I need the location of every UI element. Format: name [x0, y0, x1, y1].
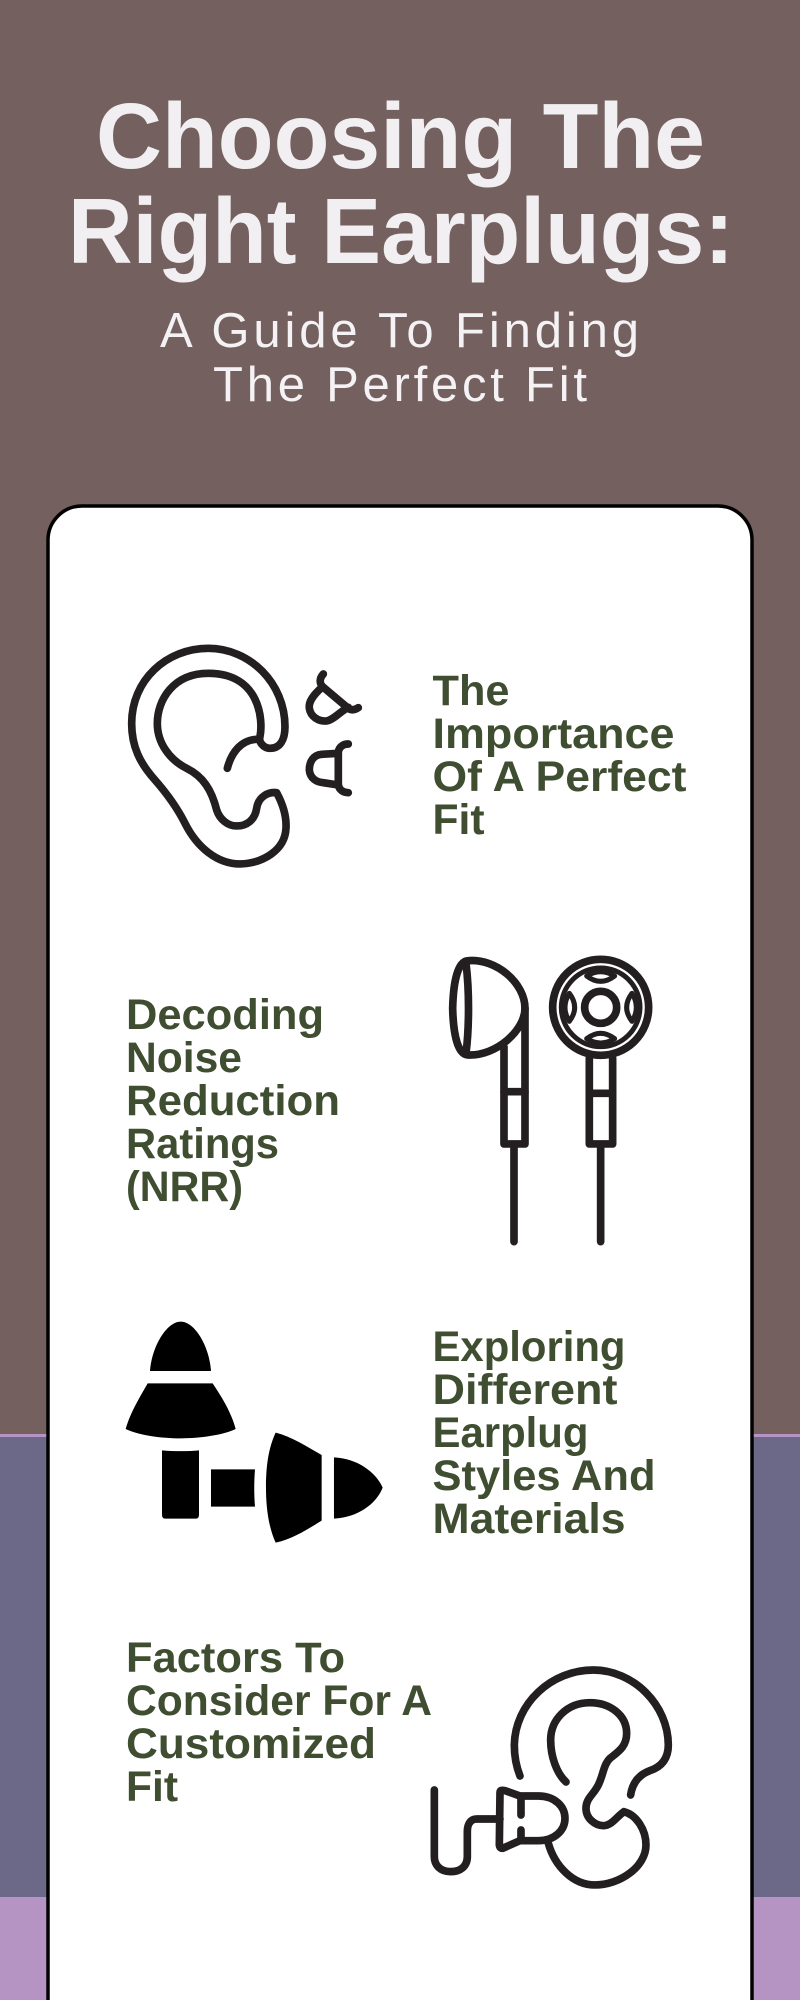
heading: decoding noise reduction ratings: Decoding: [126, 991, 324, 1039]
title: Choosing The: [96, 84, 705, 188]
heading: decoding noise reduction ratings: Reduction: [126, 1077, 340, 1125]
heading: exploring different earplug styles and materials: Earplug: [432, 1409, 588, 1457]
heading: exploring different earplug styles and materials: [432, 1323, 656, 1543]
heading: exploring different earplug styles and materials: Different: [432, 1366, 618, 1414]
panel: white card: [48, 506, 752, 2000]
icon: earbuds: [453, 959, 649, 1242]
heading: factors to consider for a customized fit: Fit: [126, 1763, 178, 1811]
heading: decoding noise reduction ratings: (NRR): [126, 1163, 243, 1211]
heading: the importance of a perfect fit: [432, 667, 686, 844]
title: [68, 84, 734, 283]
heading: decoding noise reduction ratings: Ratings: [126, 1120, 279, 1168]
title: Right Earplugs:: [68, 179, 734, 283]
heading: decoding noise reduction ratings: [126, 991, 340, 1211]
heading: the importance of a perfect fit: Of A Perfect: [432, 753, 686, 801]
icon: ear with corded earplug: [434, 1670, 668, 1885]
heading: the importance of a perfect fit: Fit: [432, 796, 484, 844]
icon: ear with earplugs: [132, 648, 358, 864]
subtitle: [160, 304, 639, 412]
heading: factors to consider for a customized fit: Factors To: [126, 1634, 345, 1682]
heading: exploring different earplug styles and materials: Styles And: [432, 1452, 656, 1500]
subtitle: The Perfect Fit: [213, 358, 587, 412]
heading: decoding noise reduction ratings: Noise: [126, 1034, 242, 1082]
heading: the importance of a perfect fit: The: [432, 667, 510, 715]
heading: exploring different earplug styles and materials: Materials: [432, 1495, 626, 1543]
heading: factors to consider for a customized fit: [126, 1634, 432, 1811]
heading: factors to consider for a customized fit: Customized: [126, 1720, 376, 1768]
heading: the importance of a perfect fit: Importance: [432, 710, 674, 758]
heading: exploring different earplug styles and materials: Exploring: [432, 1323, 626, 1371]
subtitle: A Guide To Finding: [160, 304, 639, 358]
icon: foam and flanged earplugs: [126, 1322, 383, 1543]
heading: factors to consider for a customized fit: Consider For A: [126, 1677, 432, 1725]
